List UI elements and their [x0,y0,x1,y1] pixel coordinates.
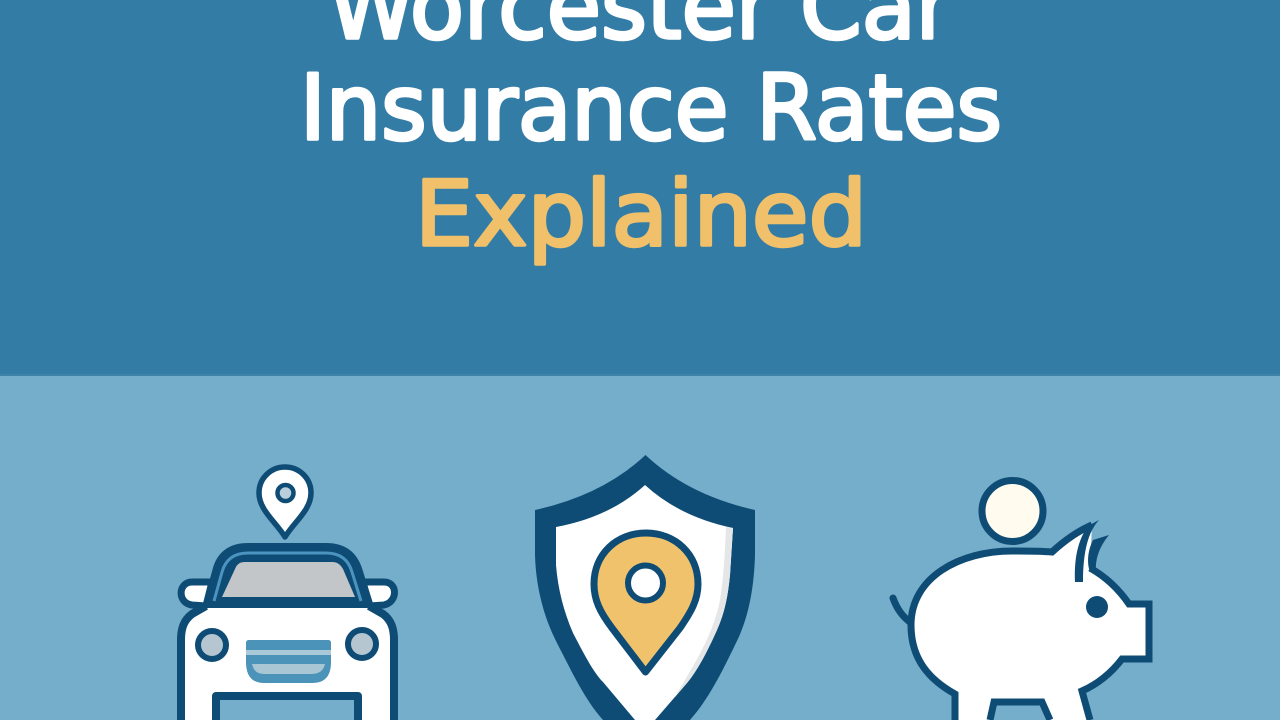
location pin [259,467,311,537]
car body [181,606,394,720]
headlights [198,630,376,659]
icon: piggy bank with coin [893,480,1149,720]
eye [1086,596,1108,618]
tail [893,598,911,623]
title line: Explained: Explained [415,162,867,267]
windshield [222,562,355,597]
shield pin [594,533,698,672]
grille [246,640,331,683]
icon: car with location pin [181,467,394,720]
side mirrors [181,582,394,606]
icon: shield with location pin [535,455,755,720]
shield [535,455,755,720]
pig body [911,525,1149,720]
roof [207,547,369,604]
ears [1075,520,1109,582]
title line: Insurance Rates: Insurance Rates [300,56,1002,161]
title [300,0,1002,267]
coin [982,480,1043,542]
